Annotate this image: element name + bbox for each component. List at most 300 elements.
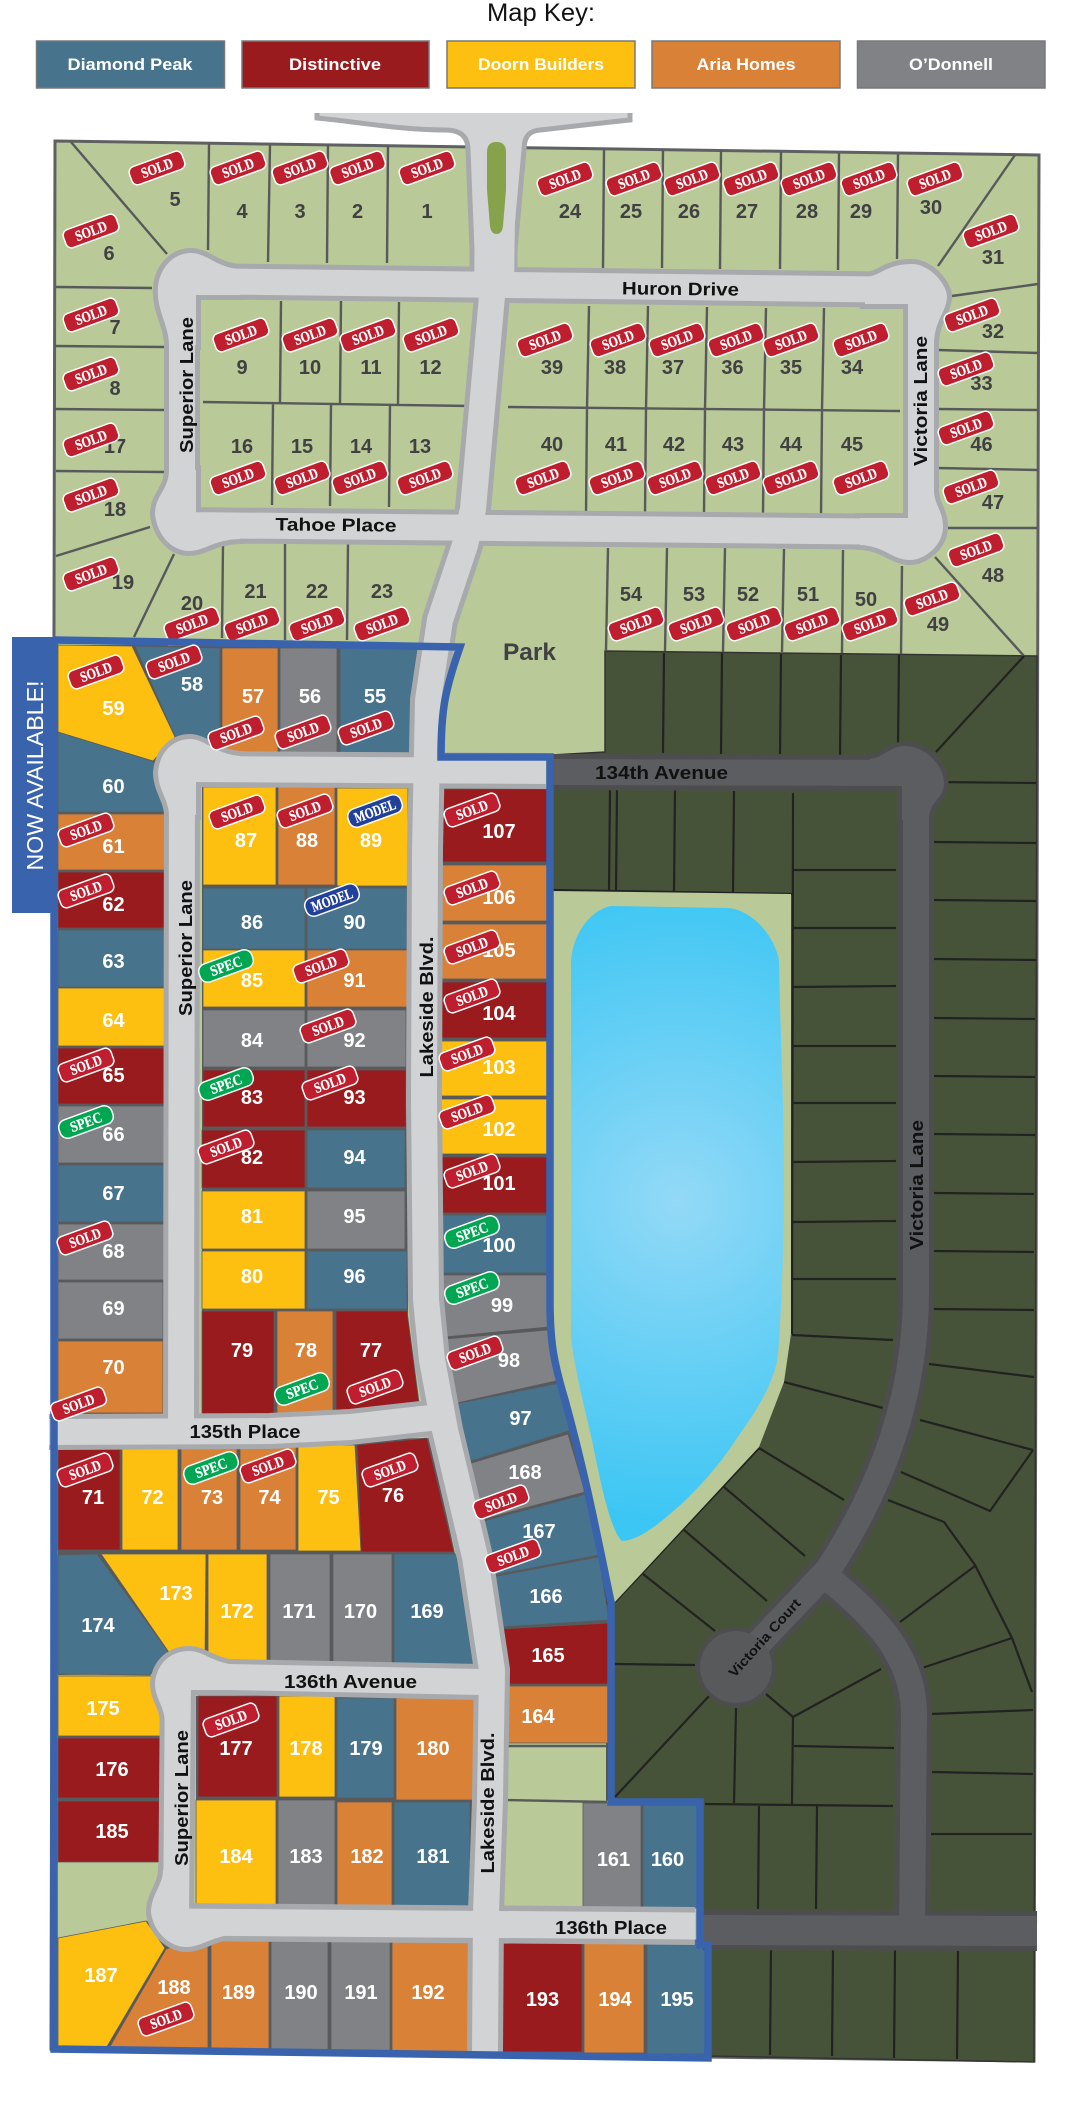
lot 65 xyxy=(58,1048,164,1104)
sold tag lot 9 xyxy=(211,316,271,354)
sold tag lot 28: SOLD xyxy=(791,167,828,193)
sold tag lot 177 xyxy=(201,1701,261,1739)
lot 179 xyxy=(337,1698,394,1798)
lot 46: 46 xyxy=(970,434,993,456)
sold tag lot 87 xyxy=(207,793,267,831)
lot 101 xyxy=(440,1157,548,1213)
sold tag lot 107 xyxy=(442,791,502,829)
dark future phase land xyxy=(552,651,1037,2062)
legend item: O'Donnell: O’Donnell xyxy=(909,55,993,74)
lot 102 xyxy=(440,1099,548,1154)
sold tag lot 54 xyxy=(606,605,666,643)
lot 12: 12 xyxy=(419,357,442,379)
lot 70: 70 xyxy=(102,1357,125,1379)
spec tag lot 83 xyxy=(196,1065,256,1103)
sold tag lot 188 xyxy=(136,2000,196,2038)
lot 68 xyxy=(58,1224,164,1280)
lot 181 xyxy=(394,1802,470,1906)
sold tag lot 31: SOLD xyxy=(973,219,1010,245)
sold tag lot 70: SOLD xyxy=(61,1392,97,1418)
sold tag lot 36: SOLD xyxy=(718,328,755,354)
lot 29: 29 xyxy=(850,201,872,223)
lot 53: 53 xyxy=(683,584,705,606)
sold tag lot 71: SOLD xyxy=(67,1458,104,1484)
sold tag lot 40: SOLD xyxy=(525,466,562,492)
lot 79: 79 xyxy=(231,1340,253,1362)
lot 105: 105 xyxy=(482,940,516,962)
sold tag lot 29 xyxy=(839,160,899,198)
lot 15: 15 xyxy=(291,436,313,458)
lot 166 xyxy=(492,1557,609,1627)
road label: Victoria Lane upper: Victoria Lane xyxy=(911,336,931,466)
sold tag lot 48 xyxy=(946,531,1006,569)
lot 97: 97 xyxy=(509,1408,532,1430)
sold tag lot 11: SOLD xyxy=(350,323,387,349)
sold tag lot 70 xyxy=(49,1385,108,1423)
sold tag lot 103: SOLD xyxy=(449,1042,486,1068)
sold tag lot 31 xyxy=(961,212,1021,250)
lot 21: 21 xyxy=(244,581,267,603)
lot 7: 7 xyxy=(109,317,121,339)
sold tag lot 57 xyxy=(206,714,266,752)
sold tag lot 77 xyxy=(345,1368,405,1406)
entry median xyxy=(487,142,506,234)
sold tag lot 13: SOLD xyxy=(407,466,444,492)
lot 78: 78 xyxy=(295,1340,317,1362)
sold tag lot 12: SOLD xyxy=(413,323,450,349)
lot divider underlay xyxy=(58,645,707,2054)
spec tag lot 66 xyxy=(56,1103,116,1141)
sold tag lot 54: SOLD xyxy=(618,612,655,638)
sold tag lot 10: SOLD xyxy=(292,323,329,349)
lot 183 xyxy=(278,1800,335,1906)
sold tag lot 71 xyxy=(55,1451,115,1489)
lot 84 xyxy=(203,1010,305,1067)
lot 36: 36 xyxy=(721,357,744,379)
sold tag lot 56: SOLD xyxy=(285,720,322,746)
lot 33: 33 xyxy=(970,373,993,395)
sold tag lot 92 xyxy=(298,1007,358,1045)
road label: Lakeside Blvd upper: Lakeside Blvd. xyxy=(417,936,437,1078)
lot 95 xyxy=(307,1191,405,1249)
road label: Huron Drive: Huron Drive xyxy=(622,278,739,300)
sold tag lot 177: SOLD xyxy=(213,1708,250,1734)
sold tag lot 91 xyxy=(291,947,351,985)
lot 181: 181 xyxy=(416,1846,450,1868)
lot 169: 169 xyxy=(410,1601,444,1623)
lot 49: 49 xyxy=(927,614,949,636)
sold tag lot 29: SOLD xyxy=(851,167,888,193)
legend item: O'Donnell xyxy=(858,41,1045,88)
lot 189: 189 xyxy=(222,1982,255,2004)
sold tag lot 168 xyxy=(471,1483,531,1521)
lot 185: 185 xyxy=(95,1821,129,1843)
lot 81 xyxy=(202,1191,305,1249)
lot 61 xyxy=(58,814,165,870)
sold tag lot 32 xyxy=(942,296,1002,334)
lot 70 xyxy=(58,1341,163,1413)
lot 59: 59 xyxy=(102,698,125,720)
sold tag lot 188: SOLD xyxy=(148,2007,185,2033)
lot 63 xyxy=(58,930,165,987)
sold tag lot 102 xyxy=(437,1093,497,1131)
sold tag lot 56 xyxy=(273,713,333,751)
lot 59 xyxy=(58,645,175,761)
lot 18: 18 xyxy=(104,499,126,521)
lot 2: 2 xyxy=(352,201,363,223)
sold tag lot 2 xyxy=(328,149,387,187)
sold tag lot 35 xyxy=(761,321,821,359)
spec tag lot 78: SPEC xyxy=(284,1377,321,1403)
sold tag lot 61: SOLD xyxy=(68,818,105,844)
lake xyxy=(571,906,784,1541)
sold tag lot 12 xyxy=(401,316,461,354)
lot 160: 160 xyxy=(651,1849,684,1871)
lot 93: 93 xyxy=(343,1087,366,1109)
lot 77: 77 xyxy=(360,1340,382,1362)
lot 32: 32 xyxy=(982,321,1004,343)
sold tag lot 22 xyxy=(287,605,347,643)
road label: Victoria Court: Victoria Court xyxy=(726,1595,804,1680)
lot 185 xyxy=(58,1801,162,1862)
spec tag lot 85 xyxy=(196,947,256,985)
lot 73 xyxy=(181,1445,237,1550)
lot 77 xyxy=(336,1311,420,1416)
park label: Park xyxy=(503,639,557,666)
lot 19: 19 xyxy=(112,572,134,594)
lot 90 xyxy=(307,888,407,949)
legend item: Diamond Peak xyxy=(36,41,224,88)
lot 88 xyxy=(278,787,335,885)
lot 85: 85 xyxy=(241,970,263,992)
sold tag lot 33 xyxy=(936,350,996,388)
lot 178 xyxy=(279,1696,335,1797)
lot 27: 27 xyxy=(736,201,758,223)
sold tags: upper phases xyxy=(61,149,1021,643)
road label: Lakeside Blvd lower: Lakeside Blvd. xyxy=(478,1732,498,1874)
road label: 135th Place: 135th Place xyxy=(190,1422,300,1442)
sold tag lot 88 xyxy=(275,792,335,830)
sold tag lot 28 xyxy=(779,160,839,198)
sold tag lot 42 xyxy=(645,459,705,497)
lot 184 xyxy=(196,1800,276,1906)
sold tag lot 38: SOLD xyxy=(600,328,637,354)
lot 62 xyxy=(58,872,165,928)
lot 66: 66 xyxy=(102,1124,125,1146)
sold tag lot 24 xyxy=(535,160,595,198)
lot 90: 90 xyxy=(343,912,366,934)
lot 75: 75 xyxy=(317,1487,340,1509)
lot 165: 165 xyxy=(531,1645,565,1667)
lot 73: 73 xyxy=(201,1487,223,1509)
lot 174: 174 xyxy=(81,1615,116,1637)
sold tag lot 30: SOLD xyxy=(917,167,954,193)
sold tag lot 49 xyxy=(902,580,962,618)
lot 43: 43 xyxy=(722,434,744,456)
sold tag lot 23 xyxy=(352,605,412,643)
lot 63: 63 xyxy=(102,951,125,973)
lot 71: 71 xyxy=(82,1487,104,1509)
lot 161 xyxy=(583,1803,641,1908)
lot 58: 58 xyxy=(181,674,203,696)
sold tag lot 65 xyxy=(56,1046,116,1084)
sold tag lot 65: SOLD xyxy=(68,1053,105,1079)
road label: 136th Place: 136th Place xyxy=(555,1918,667,1938)
sold tag lot 57: SOLD xyxy=(218,721,255,747)
sold tag lot 36 xyxy=(706,321,766,359)
lot 47: 47 xyxy=(982,492,1004,514)
lot 180: 180 xyxy=(416,1738,450,1760)
lot 14: 14 xyxy=(350,436,373,458)
legend item: Aria Homes: Aria Homes xyxy=(696,55,796,74)
lot 91 xyxy=(307,950,407,1007)
sold tag lot 1: SOLD xyxy=(409,156,446,182)
sold tag lot 168: SOLD xyxy=(483,1490,520,1516)
sold tag lot 40 xyxy=(513,459,573,497)
lot 3: 3 xyxy=(294,201,306,223)
road label: Superior Lane lower: Superior Lane xyxy=(172,1730,192,1866)
lot 98: 98 xyxy=(498,1350,520,1372)
road label: Superior Lane middle: Superior Lane xyxy=(176,880,196,1016)
sold tag lot 27 xyxy=(721,160,781,198)
sold tag lot 14 xyxy=(330,459,390,497)
lot 40: 40 xyxy=(541,434,563,456)
lot 87 xyxy=(203,787,276,885)
lot 96: 96 xyxy=(343,1266,366,1288)
lot 8: 8 xyxy=(109,378,121,400)
road label: Superior Lane upper: Superior Lane xyxy=(177,317,197,453)
lot 193: 193 xyxy=(526,1989,559,2011)
lot 88: 88 xyxy=(296,830,318,852)
lot 188 xyxy=(108,1935,208,2050)
sold tag lot 82: SOLD xyxy=(208,1135,245,1161)
sold tag lot 50: SOLD xyxy=(852,612,889,638)
sold tag lot 58 xyxy=(144,643,204,681)
lot 193 xyxy=(500,1940,582,2052)
status tags: now available phase xyxy=(49,643,543,2038)
sold tag lot 92: SOLD xyxy=(310,1014,347,1040)
sold tag lot 22: SOLD xyxy=(299,612,336,638)
lot 60: 60 xyxy=(102,776,125,798)
sold tag lot 48: SOLD xyxy=(958,538,995,564)
lot 25: 25 xyxy=(620,201,642,223)
lot 99 xyxy=(440,1275,548,1337)
lot 83 xyxy=(203,1070,305,1127)
sold tag lot 62 xyxy=(56,872,116,910)
lot 170 xyxy=(333,1554,392,1664)
lot 98 xyxy=(445,1330,560,1403)
sold tag lot 52 xyxy=(724,605,784,643)
sold tag lot 20: SOLD xyxy=(174,612,211,638)
lot 44: 44 xyxy=(780,434,803,456)
sold tag lot 52: SOLD xyxy=(736,612,773,638)
sold tag lot 106: SOLD xyxy=(454,876,491,902)
lot 28: 28 xyxy=(796,201,818,223)
lot 67: 67 xyxy=(102,1183,125,1205)
lot 87: 87 xyxy=(235,830,257,852)
lot 76: 76 xyxy=(382,1485,404,1507)
lot 172 xyxy=(208,1554,267,1664)
sold tag lot 42: SOLD xyxy=(657,466,694,492)
sold tag lot 2: SOLD xyxy=(340,156,376,182)
lot 72: 72 xyxy=(141,1487,164,1509)
sold tag lot 87: SOLD xyxy=(219,800,256,826)
lot 167 xyxy=(480,1494,599,1575)
legend item: Distinctive: Distinctive xyxy=(289,55,381,74)
sold tag lot 3: SOLD xyxy=(282,156,319,182)
sold tag lot 13 xyxy=(395,459,455,497)
lot 81: 81 xyxy=(241,1206,263,1228)
lot 189 xyxy=(211,1935,269,2050)
lot 99: 99 xyxy=(491,1295,513,1317)
lot 79 xyxy=(202,1311,274,1416)
sold tag lot 44: SOLD xyxy=(773,466,810,492)
lot 183: 183 xyxy=(289,1846,323,1868)
sold tag lot 18 xyxy=(61,476,121,514)
lot 91: 91 xyxy=(343,970,366,992)
sold tag lot 27: SOLD xyxy=(733,167,770,193)
sold tag lot 93: SOLD xyxy=(312,1071,349,1097)
lot 41: 41 xyxy=(605,434,627,456)
lot 58 xyxy=(135,646,220,770)
lot 96 xyxy=(307,1251,407,1309)
lot 26: 26 xyxy=(678,201,700,223)
lot 101: 101 xyxy=(482,1173,516,1195)
lot 11: 11 xyxy=(360,357,382,379)
sold tag lot 37 xyxy=(647,321,707,359)
lot 38: 38 xyxy=(604,357,626,379)
sold tag lot 7 xyxy=(61,296,121,334)
lot 100: 100 xyxy=(482,1235,516,1257)
lot 55 xyxy=(340,648,425,760)
now available banner xyxy=(12,637,58,913)
lot 105 xyxy=(440,924,548,979)
sold tag lot 51: SOLD xyxy=(794,612,831,638)
lot 64 xyxy=(58,988,165,1046)
lot 103 xyxy=(440,1041,548,1096)
sold tag lot 35: SOLD xyxy=(773,328,810,354)
lot lines: green phases xyxy=(55,142,1038,1802)
sold tag lot 16: SOLD xyxy=(220,466,257,492)
lot 67 xyxy=(58,1165,164,1222)
sold tag lot 39 xyxy=(515,321,575,359)
lot 20: 20 xyxy=(181,593,203,615)
legend item: Doorn Builders: Doorn Builders xyxy=(478,55,604,74)
sold tag lot 21: SOLD xyxy=(234,612,271,638)
lot 176 xyxy=(58,1738,163,1798)
sold tag lot 53 xyxy=(666,605,726,643)
lot 17: 17 xyxy=(104,436,126,458)
lot 94 xyxy=(307,1130,405,1188)
sold tag lot 58: SOLD xyxy=(156,650,193,676)
sold tag lot 105: SOLD xyxy=(454,935,491,961)
sold tag lot 98 xyxy=(445,1334,505,1372)
sold tag lot 43: SOLD xyxy=(715,466,752,492)
cover above entry road xyxy=(300,95,650,113)
sold tag lot 44 xyxy=(761,459,821,497)
lot 192 xyxy=(392,1935,472,2053)
lot 168 xyxy=(465,1434,585,1520)
sold tag lot 53: SOLD xyxy=(678,612,715,638)
sold tag lot 20 xyxy=(162,605,222,643)
sold tag lot 68 xyxy=(55,1219,115,1257)
sold tag lot 103 xyxy=(437,1035,497,1073)
lot 24: 24 xyxy=(559,201,582,223)
sold tag lot 105 xyxy=(442,928,502,966)
lot 94: 94 xyxy=(343,1147,366,1169)
lot 165 xyxy=(500,1623,609,1684)
lot 160 xyxy=(643,1803,698,1908)
colored builder lots xyxy=(58,645,707,2054)
lot 92 xyxy=(307,1010,406,1067)
lot 195: 195 xyxy=(660,1989,694,2011)
sold tag lot 6 xyxy=(61,212,121,250)
sold tag lot 102: SOLD xyxy=(449,1100,486,1126)
now available banner: NOW AVAILABLE! xyxy=(22,680,48,871)
lot 171 xyxy=(270,1554,330,1664)
sold tag lot 9: SOLD xyxy=(223,323,260,349)
lot 104 xyxy=(440,982,548,1038)
sold tag lot 7: SOLD xyxy=(73,303,110,329)
lot 69: 69 xyxy=(102,1298,125,1320)
lot 100 xyxy=(440,1215,548,1273)
sold tag lot 8: SOLD xyxy=(73,362,110,388)
lot 106: 106 xyxy=(482,887,516,909)
lot 172: 172 xyxy=(220,1601,254,1623)
lot 22: 22 xyxy=(306,581,328,603)
sold tag lot 34 xyxy=(831,321,891,359)
lot 194 xyxy=(584,1940,644,2053)
sold tag lot 24: SOLD xyxy=(547,167,584,193)
lot 52: 52 xyxy=(737,584,759,606)
sold tag lot 91: SOLD xyxy=(303,954,340,980)
sold tag lot 19: SOLD xyxy=(73,562,110,588)
road label: Tahoe Place: Tahoe Place xyxy=(275,514,397,536)
spec tag lot 100: SPEC xyxy=(454,1220,491,1246)
lot 72 xyxy=(122,1445,178,1550)
lot 187 xyxy=(58,1921,165,2050)
lot 89: 89 xyxy=(360,830,382,852)
lot 57 xyxy=(222,648,278,760)
sold tag lot 16 xyxy=(208,459,268,497)
sold tag lot 38 xyxy=(588,321,648,359)
lot 102: 102 xyxy=(482,1119,516,1141)
lot 175 xyxy=(58,1676,165,1736)
lot 188: 188 xyxy=(157,1977,191,1999)
sold tag lot 21 xyxy=(222,605,282,643)
lot 74 xyxy=(240,1445,296,1550)
sold tag lot 46 xyxy=(936,409,996,447)
sold tag lot 59 xyxy=(66,653,126,691)
lot 57: 57 xyxy=(242,686,264,708)
lot 168: 168 xyxy=(508,1462,542,1484)
sold tag lot 101: SOLD xyxy=(454,1159,491,1185)
sold tag lot 4: SOLD xyxy=(220,156,257,182)
spec tag lot 66: SPEC xyxy=(68,1110,105,1136)
lot 97 xyxy=(450,1383,572,1461)
lot 45: 45 xyxy=(841,434,863,456)
sold tag lot 6: SOLD xyxy=(73,219,110,245)
sold tag lot 5 xyxy=(127,149,187,187)
lot 191: 191 xyxy=(344,1982,378,2004)
lot 166: 166 xyxy=(529,1586,563,1608)
lot 170: 170 xyxy=(344,1601,377,1623)
sold tag lot 37: SOLD xyxy=(659,328,696,354)
sold tag lot 18: SOLD xyxy=(73,483,110,509)
spec tag lot 99: SPEC xyxy=(454,1276,491,1302)
lot 89 xyxy=(337,788,408,886)
sold tag lot 34: SOLD xyxy=(843,328,880,354)
